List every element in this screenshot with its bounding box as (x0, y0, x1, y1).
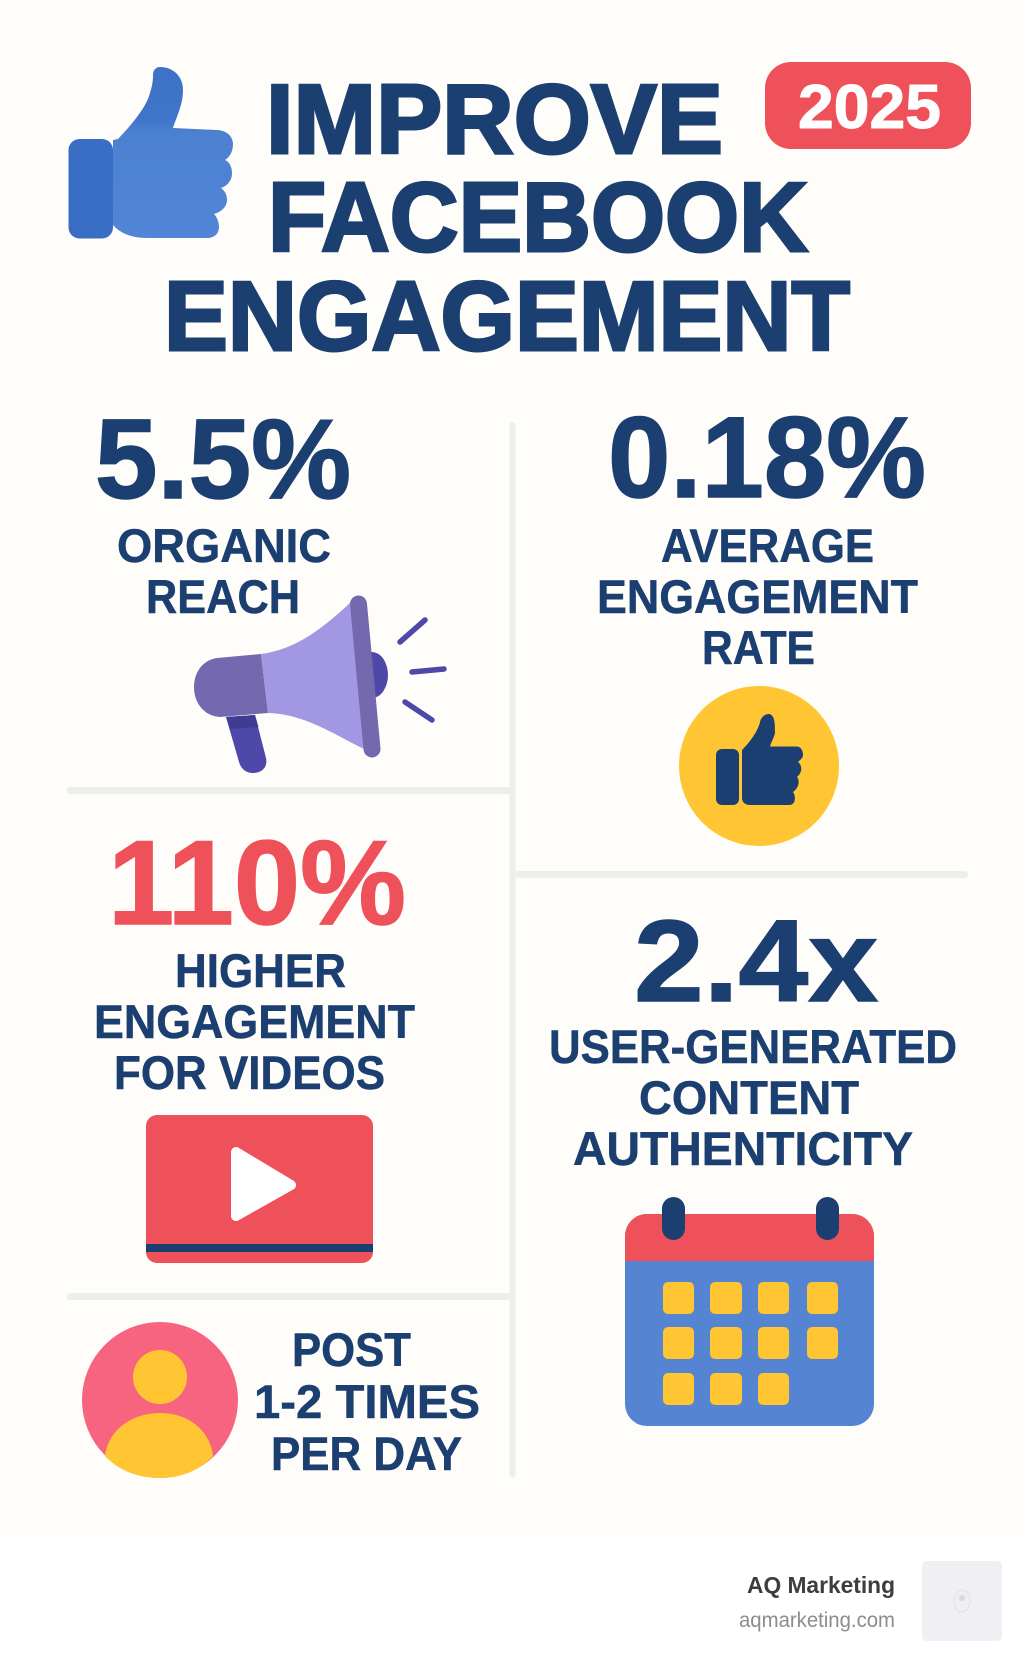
stat: 0.18%: 0.18% (608, 394, 926, 522)
header (68, 62, 971, 371)
title: ENGAGEMENT (164, 261, 850, 371)
stat: 5.5%: 5.5% (95, 396, 351, 522)
label: average engagement rate (597, 519, 918, 674)
panel: average engagement rate (597, 394, 926, 846)
panel: user-generated content authenticity (549, 896, 957, 1426)
label: average engagement rate: AVERAGE (661, 519, 874, 572)
label: post 1-2 times per day (254, 1323, 480, 1480)
icon: blue thumbs up (68, 67, 233, 238)
label: average engagement rate: ENGAGEMENT (597, 570, 918, 623)
label: higher engagement for videos (94, 944, 415, 1099)
panel: organic reach (95, 396, 444, 773)
year badge (765, 62, 971, 149)
label: user-generated content authenticity: AUTHENTICITY (573, 1122, 913, 1175)
title: IMPROVE (266, 64, 723, 174)
label: post 1-2 times per day: 1-2 TIMES (254, 1375, 480, 1428)
label: higher engagement for videos: HIGHER (175, 944, 346, 997)
label: organic reach: REACH (146, 570, 300, 623)
icon: thumbs up on yellow circle (679, 686, 839, 846)
icon: user avatar (82, 1322, 238, 1478)
grid dividers (67, 422, 968, 1477)
icon: megaphone (194, 602, 444, 773)
stat: 2.4x: 2.4x (634, 896, 878, 1026)
brand url: aqmarketing.com (739, 1609, 895, 1632)
title: FACEBOOK (268, 162, 808, 272)
icon: video player (146, 1115, 373, 1263)
panel: post frequency (82, 1322, 480, 1480)
stat: 110%: 110% (108, 816, 406, 950)
label: average engagement rate: RATE (702, 621, 815, 674)
label: organic reach: ORGANIC (117, 519, 331, 572)
year badge: 2025 (798, 73, 941, 142)
footer attribution (739, 1561, 1002, 1641)
title (164, 64, 850, 371)
icon: calendar (625, 1197, 874, 1426)
label: organic reach (117, 519, 331, 623)
label: higher engagement for videos: FOR VIDEOS (114, 1046, 385, 1099)
label: user-generated content authenticity: CONTENT (639, 1071, 859, 1124)
label: user-generated content authenticity: USER-GENERATED (549, 1020, 957, 1073)
brand name: AQ Marketing (747, 1572, 895, 1598)
label: post 1-2 times per day: POST (292, 1323, 411, 1376)
panel: higher engagement for videos (94, 816, 415, 1263)
label: post 1-2 times per day: PER DAY (271, 1427, 462, 1480)
label: user-generated content authenticity (549, 1020, 957, 1175)
label: higher engagement for videos: ENGAGEMENT (94, 995, 415, 1048)
logo placeholder (922, 1561, 1002, 1641)
